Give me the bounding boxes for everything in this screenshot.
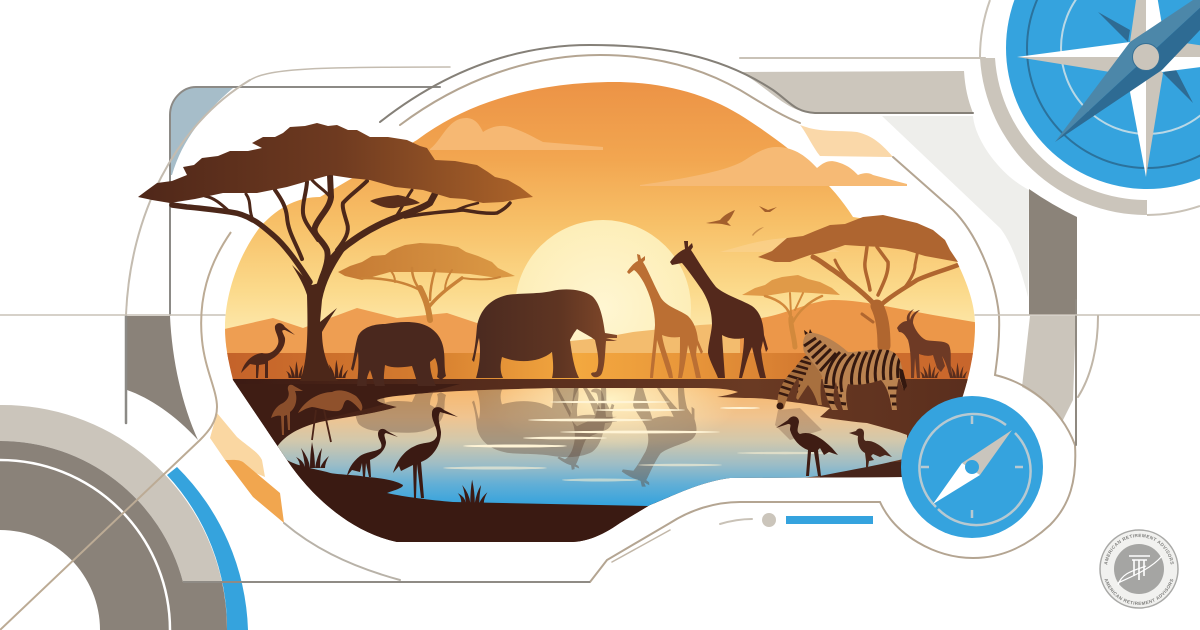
brown crane on ground	[271, 385, 303, 435]
frame: peach and orange tabs	[210, 413, 284, 523]
light giraffe	[627, 254, 703, 378]
crane large foreground	[393, 407, 458, 498]
small right tree	[742, 275, 840, 347]
crane right small	[849, 429, 892, 467]
compass star	[1017, 42, 1146, 57]
dial	[901, 396, 1043, 538]
tree canopy	[138, 123, 533, 203]
water	[277, 388, 907, 515]
crane on bank	[241, 323, 295, 378]
tree trunk	[292, 250, 345, 381]
water streaks	[443, 401, 833, 482]
frame: dark block left	[125, 316, 198, 440]
dial ring	[919, 414, 1031, 525]
wisp clouds	[720, 238, 840, 252]
hills centre	[550, 324, 740, 353]
crane right large	[776, 416, 838, 476]
mid tree	[338, 243, 515, 320]
frame: dark block right	[1029, 189, 1077, 315]
hub	[965, 460, 979, 474]
frame: beige panel top	[740, 71, 973, 113]
small elephant	[351, 322, 446, 386]
large tree foreground	[138, 123, 533, 381]
seal logo	[1099, 529, 1179, 609]
frame: peach cloud tab right	[800, 125, 893, 157]
frame: concentric rings bottom left	[0, 405, 590, 630]
big elephant	[472, 289, 617, 378]
bottom dot	[762, 513, 776, 527]
zebra grazing	[776, 352, 822, 410]
frame: light gray panel top right	[882, 116, 1029, 297]
dark giraffe	[670, 241, 768, 378]
foreground tufts	[296, 442, 487, 503]
needle	[962, 430, 1012, 475]
zebra reflection	[775, 408, 822, 440]
sky	[220, 78, 980, 348]
bottom blue bar	[786, 516, 873, 524]
ground	[220, 379, 980, 549]
right big tree trunk and branches	[813, 247, 958, 346]
seal logo: AMERICAN RETIREMENT ADVISORS	[1104, 534, 1174, 565]
flying birds	[706, 206, 777, 236]
compass needle	[1055, 0, 1200, 142]
gazelle	[897, 309, 953, 378]
water glow	[351, 385, 833, 487]
savanna scene	[220, 78, 980, 552]
flamingo on ground	[298, 390, 362, 442]
sun	[516, 220, 691, 341]
tree tuft	[370, 195, 420, 208]
band	[220, 353, 980, 383]
right big tree canopy	[758, 215, 958, 262]
top right compass	[980, 0, 1200, 215]
frame: blue-gray corner top left	[170, 87, 233, 175]
frame: beige block right	[1022, 316, 1076, 422]
cloud right	[640, 147, 907, 186]
hills left	[225, 308, 480, 360]
bank tufts	[286, 360, 968, 378]
tree trunk and branches	[172, 175, 510, 292]
reflections	[351, 388, 617, 457]
secondary points	[1098, 12, 1130, 42]
compass ring	[980, 58, 1147, 215]
hills right	[740, 300, 980, 360]
crane small foreground	[347, 429, 398, 477]
cloud left	[430, 118, 603, 150]
zebra standing	[803, 329, 907, 410]
seal logo: AMERICAN RETIREMENT ADVISORS	[1104, 578, 1174, 605]
bottom compass	[901, 396, 1043, 538]
beige diagonal arc over rings	[0, 232, 231, 630]
compass hub	[1132, 44, 1160, 70]
compass dial	[1006, 0, 1200, 189]
bank shadow left	[236, 384, 460, 442]
